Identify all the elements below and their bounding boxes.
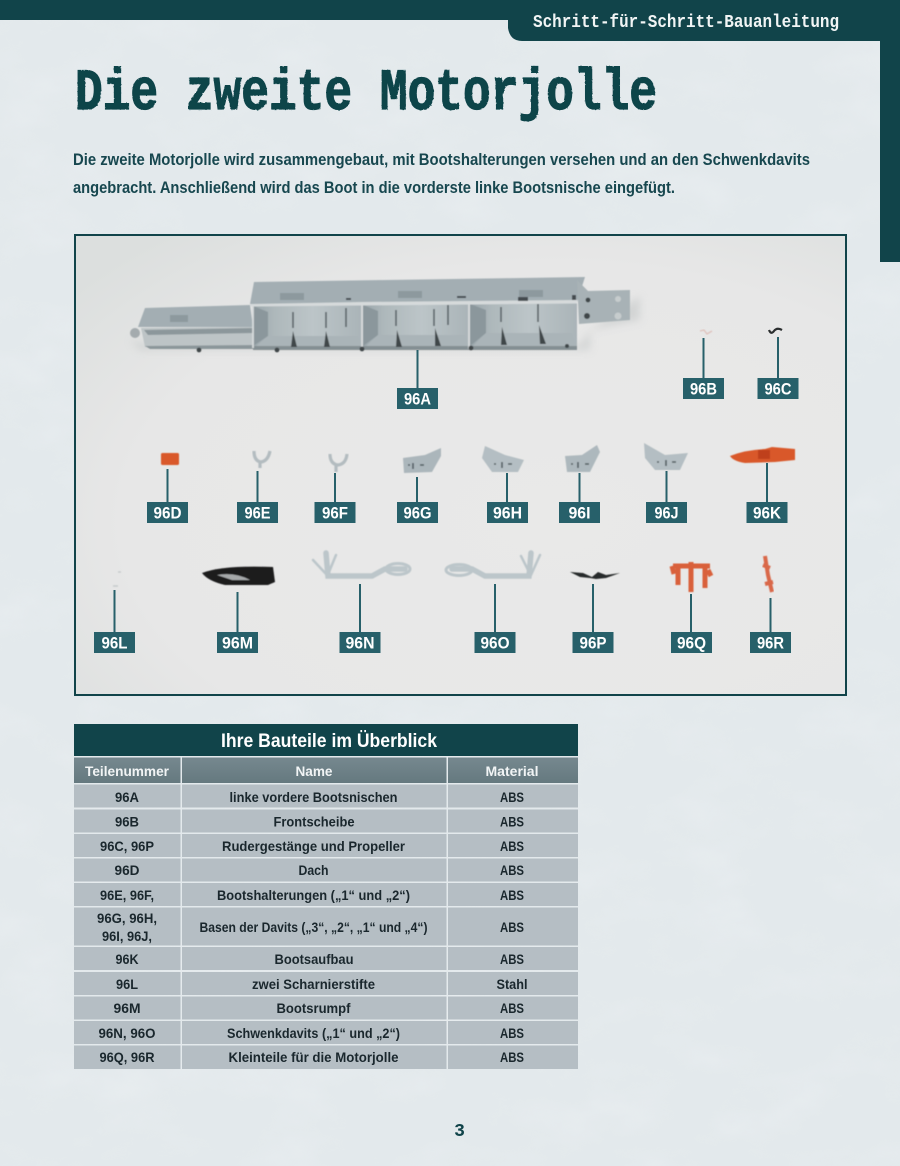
part 96M: boat hull: [202, 567, 275, 585]
label 96R: [750, 632, 791, 653]
table header row: Name: [296, 763, 333, 779]
intro text: angebracht. Anschließend wird das Boot in die vorderste linke Bootsnische eingefügt.: [73, 179, 675, 197]
part 96G: davit base: [403, 448, 441, 473]
label 96B: [683, 378, 724, 399]
row 96G to 96J: ABS: [500, 919, 524, 935]
row 96G to 96J: Basen der Davits („3“, „2“, „1“ und „4“): [200, 919, 428, 935]
label 96R: 96R: [757, 634, 784, 652]
row 96A: ABS: [500, 789, 524, 805]
row 96L: 96L: [116, 976, 138, 992]
label 96I: 96I: [568, 504, 590, 522]
row 96L: [74, 972, 578, 995]
part 96O: swing davit: [446, 553, 540, 576]
label 96P: [572, 632, 614, 653]
label 96E: 96E: [244, 504, 270, 522]
row 96G to 96J: 96G, 96H,: [97, 910, 157, 926]
row 96K: ABS: [500, 951, 524, 967]
row 96N, 96O: 96N, 96O: [98, 1025, 156, 1041]
label 96F: 96F: [322, 504, 348, 522]
row 96E, 96F: 96E, 96F,: [100, 887, 154, 903]
part 96N: swing davit: [313, 553, 410, 576]
label 96M: 96M: [222, 634, 253, 652]
row 96M: ABS: [500, 1000, 524, 1016]
label 96A: 96A: [404, 390, 431, 408]
part 96H: davit base: [482, 446, 524, 472]
row 96B: [74, 810, 578, 832]
table title: [74, 724, 578, 756]
row 96E, 96F: [74, 883, 578, 906]
row 96M: Bootsrumpf: [276, 1000, 351, 1016]
row 96M: 96M: [114, 1000, 140, 1016]
row 96E, 96F: ABS: [500, 887, 524, 903]
part 96J: davit base: [644, 443, 688, 470]
row 96C, 96P: ABS: [500, 838, 524, 854]
label 96H: 96H: [493, 504, 522, 522]
row 96M: [74, 996, 578, 1020]
row 96C, 96P: 96C, 96P: [100, 838, 154, 854]
row 96D: Dach: [298, 862, 328, 878]
label 96C: 96C: [764, 380, 792, 398]
label 96K: 96K: [753, 504, 781, 522]
part 96D: roof: [161, 453, 179, 465]
row 96B: 96B: [115, 814, 139, 830]
row 96C, 96P: [74, 834, 578, 857]
intro text: [73, 151, 810, 197]
row 96C, 96P: Rudergestänge und Propeller: [222, 838, 406, 854]
label 96F: [314, 502, 356, 523]
row 96K: [74, 947, 578, 970]
label 96B: 96B: [690, 380, 717, 398]
row 96A: linke vordere Bootsnischen: [230, 789, 398, 805]
part 96I: davit base: [565, 445, 600, 472]
label 96G: [397, 502, 438, 523]
label 96N: 96N: [346, 634, 374, 652]
intro text: Die zweite Motorjolle wird zusammengebaut, mit Bootshalterungen versehen und an den Schwenkdavits: [73, 151, 810, 169]
row 96K: 96K: [116, 951, 138, 967]
row 96A: [74, 784, 578, 808]
label 96A: [397, 388, 438, 409]
row 96D: [74, 858, 578, 882]
row 96G to 96J: 96I, 96J,: [102, 928, 152, 944]
table header row: Teilenummer: [85, 763, 170, 779]
label 96C: [758, 378, 798, 399]
label 96O: [474, 632, 516, 653]
label 96Q: 96Q: [677, 634, 706, 652]
row 96Q, 96R: 96Q, 96R: [100, 1049, 154, 1065]
label 96H: [487, 502, 528, 523]
label 96L: 96L: [102, 634, 128, 652]
label 96D: [147, 502, 188, 523]
row 96D: 96D: [114, 862, 140, 878]
row 96N, 96O: ABS: [500, 1025, 524, 1041]
label 96G: 96G: [404, 504, 432, 522]
part 96F: boat holder: [330, 454, 347, 472]
label 96E: [237, 502, 278, 523]
parts table: [74, 724, 578, 1069]
label 96I: [559, 502, 600, 523]
label 96Q: [671, 632, 712, 653]
row 96Q, 96R: [74, 1046, 578, 1069]
label 96J: 96J: [654, 504, 678, 522]
row 96B: Frontscheibe: [274, 814, 355, 830]
running head: Schritt-für-Schritt-Bauanleitung: [533, 13, 839, 33]
row 96E, 96F: Bootshalterungen („1“ und „2“): [217, 887, 410, 903]
label 96M: [217, 632, 258, 653]
header band with tab and side bar: [0, 0, 900, 262]
part 96E: boat holder: [254, 451, 270, 468]
table title: Ihre Bauteile im Überblick: [221, 729, 437, 752]
label 96L: [94, 632, 135, 653]
row 96N, 96O: Schwenkdavits („1“ und „2“): [227, 1025, 400, 1041]
table header row: [74, 758, 578, 783]
row 96A: 96A: [115, 789, 139, 805]
row 96N, 96O: [74, 1021, 578, 1044]
label 96O: 96O: [480, 634, 510, 652]
panel: parts photo: [75, 235, 846, 695]
page number: 3: [454, 1122, 465, 1142]
part 96C: rudder linkage and propeller: [769, 329, 782, 333]
label 96D: 96D: [154, 504, 182, 522]
part 96Q: orange small parts: [672, 562, 711, 592]
table header row: Material: [486, 763, 538, 779]
row 96D: ABS: [500, 862, 524, 878]
part 96B: windscreen: [700, 330, 712, 334]
row 96K: Bootsaufbau: [274, 951, 354, 967]
row 96L: zwei Scharnierstifte: [252, 976, 375, 992]
title: Die zweite Motorjolle: [75, 62, 657, 127]
row 96G to 96J: [74, 908, 578, 946]
row 96B: ABS: [500, 814, 524, 830]
callout lines: [114, 337, 778, 632]
part 96K: boat superstructure: [730, 447, 795, 463]
row 96Q, 96R: Kleinteile für die Motorjolle: [228, 1049, 399, 1065]
part 96R: orange small parts: [763, 556, 773, 592]
row 96L: Stahl: [496, 976, 528, 992]
part 96P: propeller sprue: [570, 572, 620, 579]
part 96L: hinge pins: [113, 572, 121, 586]
part 96A: left front boat niches: [130, 277, 640, 352]
label 96P: 96P: [580, 634, 606, 652]
label 96J: [646, 502, 687, 523]
label 96N: [340, 632, 380, 653]
row 96Q, 96R: ABS: [500, 1049, 524, 1065]
label 96K: [746, 502, 788, 523]
